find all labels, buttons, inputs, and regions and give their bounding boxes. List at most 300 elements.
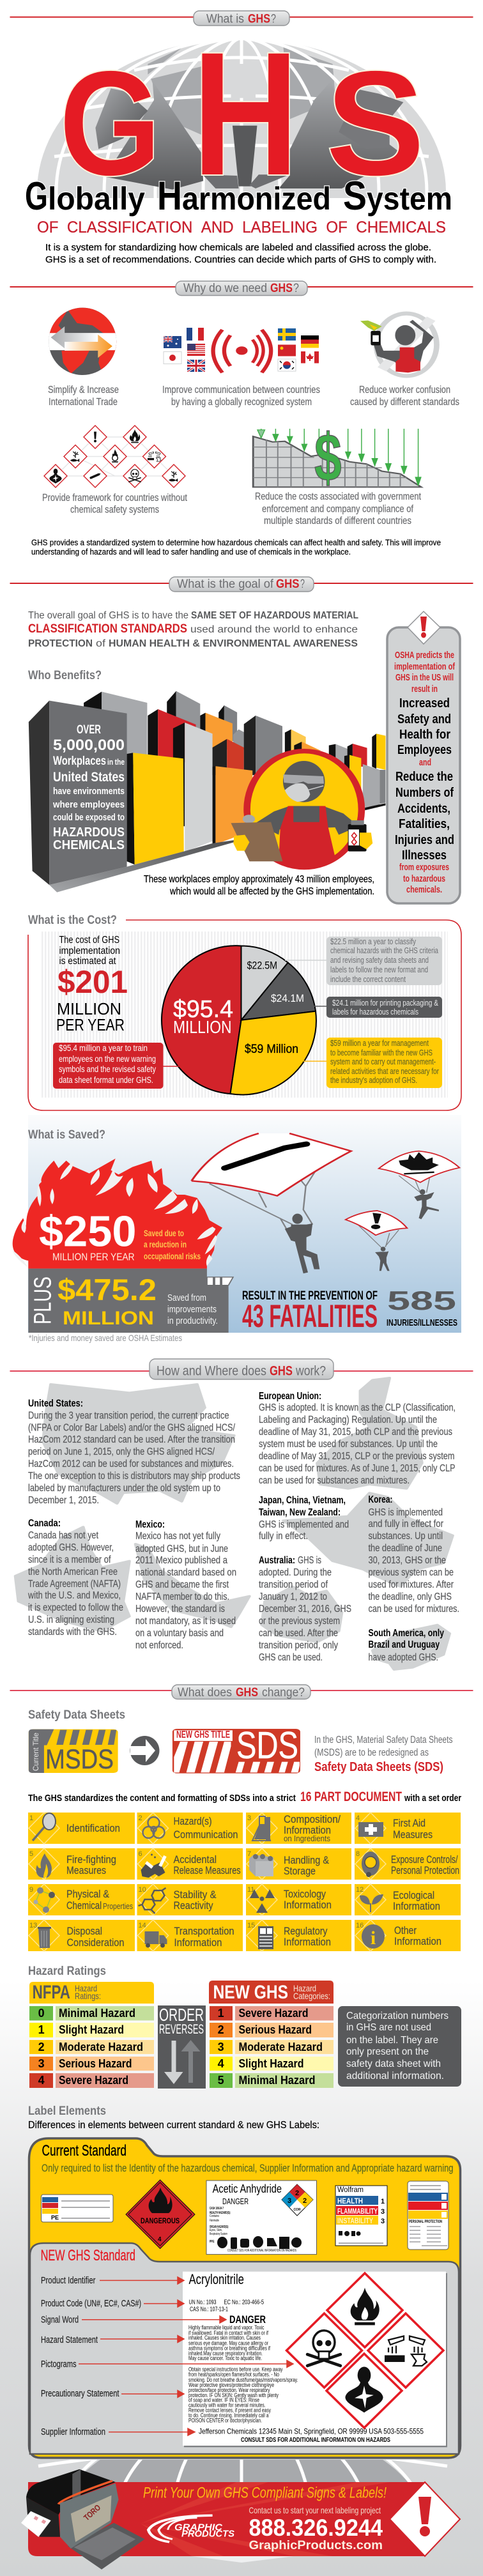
- text: 16 part document: 16 PART DOCUMENT: [300, 1790, 402, 1804]
- label sample: acetic anhydride: Flammable: [210, 2219, 219, 2223]
- section header: What is the goal of GHS?: GHS: [276, 578, 299, 591]
- contact details: [249, 2505, 383, 2552]
- section 13: [29, 1920, 124, 1951]
- panel: cost of GHS: [28, 920, 461, 1110]
- section header: How and Where does GHS work?: work?: [295, 1364, 326, 1379]
- table: new GHS hazard categories: NEW GHS: [213, 1982, 288, 2003]
- callout: training: $95.4 million a year to train: [59, 1043, 148, 1053]
- table: NFPA hazard ratings: 3: [38, 2057, 45, 2070]
- OSHA text: [394, 650, 456, 895]
- callout: training: [53, 1043, 182, 1089]
- text: Korea: 30, 2013, GHS or the: [368, 1555, 446, 1566]
- text: European Union: [259, 1391, 456, 1486]
- sample label card: CAS No.: 107-13-1: [190, 2306, 228, 2313]
- section 14: Transportation: [174, 1925, 234, 1937]
- section 4: First Aid: [393, 1817, 425, 1829]
- section 3: Information: [284, 1824, 331, 1836]
- text: European Union: can be used for substances and mixtures.: [259, 1475, 410, 1486]
- section 12: [355, 1884, 440, 1915]
- main title: H: [157, 174, 182, 218]
- stat: $250 million: MILLION PER YEAR: [52, 1252, 135, 1263]
- section header: What is the goal of GHS?: What is the goal of: [177, 578, 274, 591]
- text: Canada: the North American Free: [28, 1567, 118, 1577]
- building text: over 5,000,000 workplaces: CHEMICALS: [53, 838, 125, 852]
- badge: SDS new title: SDS: [236, 1724, 298, 1767]
- section 7: 7: [247, 1850, 251, 1858]
- text: Korea: and fully in effect for: [368, 1519, 444, 1529]
- label sample: wolfram: HEALTH: [337, 2196, 363, 2205]
- caption: trade: Simplify & Increase: [48, 385, 119, 395]
- cost summary: [56, 935, 128, 1034]
- heading: What is the Cost?: What is the Cost?: [28, 914, 117, 927]
- section 7: Handling &: [284, 1854, 330, 1866]
- text: European Union: system must be used for substances. Up until the: [259, 1439, 438, 1450]
- table: new GHS hazard categories: Minimal Hazard: [239, 2074, 316, 2087]
- text: Mexico: not mandatory, as it is used: [135, 1616, 236, 1627]
- text: South America: South America, only: [368, 1628, 444, 1639]
- main title: lobally: [48, 181, 145, 217]
- section 7: [247, 1848, 330, 1880]
- text: South America: [368, 1628, 444, 1663]
- section 15: 15: [247, 1922, 255, 1929]
- panel: OSHA predictions: [387, 611, 460, 903]
- text: MSDS redesign note: [314, 1735, 453, 1774]
- section 16: Other: [394, 1924, 417, 1936]
- table: new GHS hazard categories: Hazard: [293, 1983, 316, 1993]
- section 3: 3: [247, 1814, 251, 1822]
- text: Japan, China, Vietnam, Taiwan, New Zealand: fully in effect.: [259, 1531, 308, 1542]
- goal statement: PROTECTION: [28, 638, 93, 649]
- main title: G: [25, 174, 48, 218]
- stat: plus $475.2 million: in productivity.: [167, 1315, 218, 1326]
- contact details: Contact us to start your next labeling project: [249, 2505, 381, 2515]
- globe: [37, 40, 446, 198]
- text: Australia: can be used. After the: [259, 1628, 338, 1639]
- section 14: 14: [138, 1922, 146, 1929]
- table: new GHS hazard categories: Serious Hazard: [239, 2023, 312, 2036]
- section 2: Communication: [174, 1828, 238, 1841]
- section 3: on Ingredients: [284, 1834, 330, 1843]
- main title: ystem: [367, 181, 452, 217]
- text: Korea: [368, 1494, 459, 1614]
- section 4: [355, 1813, 433, 1844]
- intro text: It is a system for standardizing how chemicals are labeled and classified across the globe.: [45, 242, 431, 253]
- section header: What is GHS?: ?: [271, 13, 276, 26]
- OSHA text: result in: [411, 684, 438, 694]
- sample label card: EC No.: 203-466-5: [224, 2299, 264, 2306]
- section 12: Ecological: [393, 1889, 434, 1901]
- section 13: 13: [29, 1922, 37, 1929]
- heading: Label Elements: Differences in elements between current standard & new GHS Labels:: [28, 2120, 319, 2131]
- section 9: Properties: [103, 1901, 133, 1911]
- grid: 16 SDS sections: [28, 1813, 461, 1951]
- table: new GHS hazard categories: Severe Hazard: [239, 2007, 308, 2020]
- section 1: [29, 1813, 120, 1844]
- sample label card: Obtain special instructions before use. Keep away: [188, 2366, 283, 2373]
- section 15: Information: [284, 1936, 331, 1948]
- text: Australia: or the previous system: [259, 1616, 340, 1627]
- label sample: wolfram: 3: [381, 2218, 385, 2225]
- section 8: Personal Protection: [391, 1864, 459, 1876]
- text: Mexico: on a voluntary basis and: [135, 1628, 224, 1639]
- text: Canada: [27, 1518, 123, 1637]
- section header: What does GHS change?: change?: [262, 1686, 305, 1699]
- section 10: [138, 1884, 217, 1915]
- caption: framework: [42, 493, 187, 516]
- section 10: Stability &: [174, 1889, 217, 1901]
- stat: plus $475.2 million: $475.2: [57, 1273, 157, 1307]
- sample label card: May cause cancer. Toxic to aquatic life.: [188, 2355, 262, 2361]
- table: new GHS hazard categories: Slight Hazard: [239, 2057, 304, 2070]
- text: Korea: Korea:: [368, 1494, 392, 1505]
- caption: 43 million employees: These workplaces employ approximately 43 million employees,: [144, 874, 374, 885]
- label sample: wolfram: 3: [381, 2208, 385, 2216]
- building text: over 5,000,000 workplaces: where employees: [52, 799, 125, 810]
- text: Canada: it is expected to follow the: [28, 1602, 123, 1613]
- OSHA text: Health for: [399, 728, 450, 742]
- text: Mexico: However, the standard is: [135, 1604, 225, 1614]
- icon: parachuting workers: [192, 1133, 459, 1273]
- label sample: acetic anhydride: Contains: [210, 2214, 219, 2218]
- main title: armonized: [182, 181, 331, 217]
- callout: classify: chemical hazards with the GHS criteria: [330, 946, 439, 955]
- sample label card: Jefferson Chemicals 12345 Main St, Springfield, OR 99999 USA 503-555-5555: [199, 2426, 424, 2435]
- main title: S: [343, 174, 367, 218]
- table: new GHS hazard categories: 3: [218, 2041, 224, 2053]
- sample label card: to do. Continue rinsing. Immediately call a: [188, 2412, 268, 2419]
- text: United States: HazCom 2012 standard can be used. After the transition: [28, 1434, 235, 1445]
- caption: framework: Provide framework for countries without: [42, 493, 187, 503]
- pointers: label element names: [41, 2275, 293, 2437]
- logo: Graphic Products: GRAPHIC: [174, 2522, 223, 2533]
- pointers: label element names: Product Identifier: [41, 2275, 95, 2286]
- goal statement: [28, 610, 358, 649]
- icon: hazard diamonds: [44, 425, 185, 487]
- building text: over 5,000,000 workplaces: [52, 723, 125, 852]
- callout: categorization numbers: safety data sheet with: [346, 2058, 441, 2069]
- table: new GHS hazard categories: 2: [218, 2023, 224, 2036]
- 3D extrusions: [95, 64, 413, 190]
- icon: globe with trade arrows: [49, 308, 116, 375]
- callout: classify: $22.5 million a year to classify: [330, 937, 416, 946]
- logo: Graphic Products: PRODUCTS: [181, 2529, 234, 2539]
- section 14: Information: [174, 1936, 222, 1949]
- stat: $250 million: [39, 1208, 201, 1263]
- OSHA text: and: [419, 757, 431, 768]
- label sample: wolfram: FLAMMABILITY: [337, 2207, 378, 2216]
- section 16: [355, 1920, 441, 1951]
- sample label card: of soap and water. IF IN EYES: Rinse: [188, 2397, 259, 2404]
- caption: communication: by having a globally recognized system: [171, 397, 312, 408]
- sample label card: Highly flammable liquid and vapor. Toxic: [188, 2324, 264, 2331]
- table: NFPA hazard ratings: 2: [38, 2041, 45, 2053]
- text: Korea: can be used for mixtures.: [368, 1604, 459, 1614]
- sample label card: cautiously with water for several minutes.: [188, 2402, 266, 2409]
- section 11: [247, 1884, 332, 1915]
- section header: What is GHS?: GHS: [248, 13, 270, 26]
- headline: Print Your Own GHS Compliant Signs & Labels!: [143, 2484, 387, 2502]
- intro text: GHS is a set of recommendations. Countries can decide which parts of GHS to comply with.: [45, 254, 436, 265]
- table: NFPA hazard ratings: NFPA: [33, 1982, 70, 2003]
- pointers: label element names: Product Code (UN#, EC#, CAS#): [41, 2298, 141, 2309]
- sample label card: UN No.: 1093: [189, 2299, 217, 2306]
- contact details: 888.326.9244: [249, 2515, 383, 2541]
- text: Japan, China, Vietnam, Taiwan, New Zealand: [259, 1495, 349, 1542]
- text: Mexico: adopted GHS, but in June: [135, 1544, 228, 1554]
- caption: 43 million employees: which would all be affected by the GHS implementation.: [169, 886, 374, 897]
- callout: order reverses: [158, 2005, 206, 2089]
- text: Australia: Australia:: [259, 1555, 295, 1566]
- stat: plus $475.2 million: MILLION: [63, 1308, 154, 1329]
- pie labels: MILLION: [173, 1017, 231, 1037]
- icon: warning diamond: [390, 2482, 460, 2556]
- text: United States: December 1, 2015.: [28, 1495, 99, 1506]
- section 1: 1: [29, 1814, 33, 1822]
- callout: management: $59 million a year for management: [330, 1038, 429, 1048]
- section 5: Measures: [66, 1864, 106, 1876]
- heading: Current Standard: Current Standard: [42, 2142, 126, 2159]
- caption: worker: caused by different standards: [350, 397, 459, 408]
- label sample: acetic anhydride: 3: [288, 2197, 291, 2205]
- cost summary: implementation: [59, 946, 120, 956]
- heading: What is Saved?: What is Saved?: [28, 1128, 105, 1142]
- text: Japan, China, Vietnam, Taiwan, New Zealand: Japan, China, Vietnam,: [259, 1495, 346, 1506]
- section 16: 16: [356, 1922, 364, 1929]
- callout: classify: labels to follow the new format and: [330, 965, 428, 974]
- stat: $250 million: Saved due to: [144, 1228, 184, 1238]
- label sample: check box: PERSONAL PROTECTION: [409, 2220, 442, 2224]
- logo: Graphic Products: [148, 2515, 234, 2542]
- section 12: 12: [356, 1886, 364, 1894]
- text: 16 part document: The GHS standardizes the content and formatting of SDSs into a strict: [28, 1793, 296, 1804]
- table: NFPA hazard ratings: Minimal Hazard: [59, 2007, 135, 2020]
- icon: worker with clipboard: [231, 751, 372, 868]
- table: NFPA hazard ratings: Moderate Hazard: [59, 2041, 143, 2053]
- table: NFPA hazard ratings: 4: [38, 2074, 45, 2087]
- badge: MSDS current title: MSDS: [45, 1744, 114, 1775]
- caption: worker: [350, 385, 459, 408]
- section 11: Toxicology: [284, 1888, 326, 1900]
- icon: label printer: TORO: [82, 2503, 102, 2522]
- callout: categorization numbers: Categorization numbers: [346, 2011, 448, 2021]
- section header: What does GHS change?: [10, 1685, 473, 1699]
- pie labels: $59 Million: [245, 1043, 298, 1056]
- label sample: acetic anhydride: CAS# 108-24-7: [210, 2207, 224, 2211]
- text: Australia: [259, 1555, 351, 1663]
- section header: Why do we need GHS?: Why do we need: [183, 282, 267, 295]
- stat: $250 million: occupational risks: [144, 1251, 201, 1261]
- goal statement: HUMAN HEALTH & ENVIRONMENTAL AWARENESS: [109, 638, 358, 649]
- icon: arrow: [130, 1736, 160, 1765]
- section header: Why do we need GHS?: [10, 281, 473, 295]
- callout: training: data sheet format under GHS.: [59, 1075, 153, 1085]
- OSHA text: Accidents,: [397, 802, 450, 816]
- text: Mexico: 2011 Mexico published a: [135, 1555, 227, 1566]
- section 13: Disposal: [66, 1925, 102, 1937]
- label sample: acetic anhydride: 2: [295, 2189, 299, 2197]
- section 2: Hazard(s): [174, 1815, 212, 1827]
- callout: printing: [314, 997, 442, 1018]
- heading: Who Benefits?: Who Benefits?: [28, 669, 102, 682]
- section 16: Information: [394, 1935, 441, 1947]
- OSHA text: Injuries and: [395, 833, 454, 847]
- text: Canada: Canada has not yet: [28, 1530, 98, 1541]
- callout: order reverses: REVERSES: [159, 2022, 204, 2037]
- section 2: 2: [138, 1814, 142, 1822]
- text: 16 part document: with a set order: [404, 1793, 461, 1804]
- label sample: hmis small: PE: [51, 2214, 59, 2221]
- OSHA text: Employees: [397, 743, 452, 757]
- heading: Safety Data Sheets: Safety Data Sheets: [28, 1708, 125, 1722]
- section header: How and Where does GHS work?: How and Where does: [157, 1364, 266, 1379]
- label sample: wolfram: Wolfram: [337, 2185, 364, 2194]
- callout: order reverses: ORDER: [159, 2005, 204, 2025]
- section 16: i: [371, 1928, 376, 1949]
- text: Mexico: Mexico:: [135, 1519, 165, 1530]
- badge: MSDS current title: [29, 1729, 118, 1775]
- icon: flags and signal: [164, 328, 319, 372]
- label sample: acetic anhydride: Acetic Anhydride: [213, 2182, 282, 2195]
- label sample: acetic anhydride: Respiratory System: [210, 2232, 227, 2236]
- table: new GHS hazard categories: Categories:: [293, 1991, 330, 2001]
- callout: classify: and revising safety data sheets and: [330, 955, 429, 965]
- heading: Hazard Ratings: Hazard Ratings: [28, 1965, 106, 1978]
- text: United States: (NFPA or Color Bar Labels) and/or the GHS aligned HCS/: [28, 1423, 235, 1434]
- section 3: [247, 1813, 341, 1844]
- pointers: label element names: Hazard Statement: [41, 2334, 98, 2345]
- sample label card: Acrylonitrile: [189, 2271, 244, 2287]
- sample label card: inhaled.May cause respiratory irritation.: [188, 2350, 263, 2357]
- section 7: Storage: [284, 1865, 316, 1877]
- callout: management: related activities that are necessary for: [330, 1066, 440, 1076]
- text: Japan, China, Vietnam, Taiwan, New Zealand: Taiwan, New Zealand:: [259, 1507, 341, 1518]
- cost summary: MILLION: [57, 999, 121, 1018]
- callout: classify: [285, 937, 442, 985]
- text: United States: HazCom 2012 can be used for substances and mixtures.: [28, 1459, 234, 1469]
- callout: categorization numbers: additional information.: [346, 2071, 444, 2082]
- caption: communication: [162, 385, 320, 408]
- callout: categorization numbers: in GHS are not used: [346, 2022, 431, 2033]
- OSHA text: chemicals.: [406, 884, 442, 895]
- section 4: Measures: [393, 1828, 433, 1841]
- OSHA text: Fatalities,: [399, 817, 450, 831]
- section 9: Chemical: [66, 1899, 102, 1912]
- hero: globe with GHS letters: [37, 40, 446, 198]
- sample label card: Wear protective gloves/protective clothing/eye: [188, 2382, 274, 2388]
- text: Canada: U.S. in aligning existing: [28, 1614, 114, 1625]
- label sample: dangerous placard: DANGEROUS: [141, 2216, 180, 2225]
- sample label card: [183, 2271, 447, 2447]
- pie labels: $95.4: [173, 996, 233, 1023]
- text: United States: United States:: [28, 1399, 83, 1409]
- callout: categorization numbers: [338, 2006, 461, 2087]
- section 2: [138, 1813, 238, 1844]
- icon: flames: [12, 1158, 222, 1269]
- section 4: 4: [356, 1814, 360, 1822]
- page background gradient: [0, 1981, 483, 2576]
- section 9: Physical &: [66, 1888, 110, 1900]
- OSHA text: OSHA predicts the: [395, 650, 454, 661]
- text: Korea: used for mixtures. After: [368, 1579, 454, 1590]
- stat: prevention of fatalities: 585: [387, 1285, 456, 1315]
- caption: costs: enforcement and company compliance of: [262, 503, 413, 515]
- label sample: acetic anhydride: PPE:: [210, 2240, 215, 2244]
- building text: over 5,000,000 workplaces: could be exposed to: [53, 812, 125, 823]
- OSHA text: Illnesses: [402, 848, 447, 862]
- table: new GHS hazard categories: [209, 1981, 334, 2088]
- sample label card: smoking. Do not breathe dust/fume/gas/mist/vapors/spray.: [188, 2377, 298, 2383]
- label sample: wolfram: INSTABILITY: [337, 2216, 373, 2225]
- letter G: G: [59, 40, 162, 207]
- section 15: [247, 1920, 331, 1951]
- stat: $250 million: a reduction in: [144, 1239, 187, 1250]
- table: new GHS hazard categories: 4: [218, 2057, 224, 2070]
- label sample: acetic anhydride: CONSULT SDS FOR ADDITIONAL INFORMATION ON HAZARDS: [227, 2249, 296, 2253]
- callout: categorization numbers: only present on the: [346, 2046, 429, 2057]
- section header: What does GHS change?: What does: [178, 1686, 232, 1699]
- table: new GHS hazard categories: 1: [218, 2007, 224, 2020]
- sample label card: if swallowed. Fatal in contact with skin or if: [188, 2329, 268, 2336]
- heading: Label Elements: [28, 2104, 319, 2131]
- panel: current standard: [29, 2138, 460, 2458]
- callout: management: [303, 1038, 442, 1088]
- section 15: Regulatory: [284, 1925, 328, 1937]
- pointers: label element names: Precautionary Statement: [41, 2388, 119, 2399]
- section header: What is GHS?: What is: [206, 13, 244, 26]
- section 3: Composition/: [284, 1813, 341, 1825]
- OSHA text: Safety and: [397, 712, 451, 726]
- pointers: label element names: Signal Word: [41, 2314, 79, 2326]
- sample label card: asthma symptoms or breathing difficulties if: [188, 2345, 270, 2351]
- callout: classify: include the correct content: [330, 974, 406, 984]
- contact details: GraphicProducts.com: [249, 2539, 383, 2552]
- table: NFPA hazard ratings: Slight Hazard: [59, 2023, 124, 2036]
- footnote: *Injuries and money saved are OSHA Estimates: [29, 1333, 182, 1343]
- section 12: Information: [393, 1900, 440, 1912]
- text: Canada: Canada:: [28, 1518, 61, 1529]
- building text: over 5,000,000 workplaces: United States: [53, 770, 125, 785]
- OSHA text: Reduce the: [395, 770, 453, 784]
- stat: prevention of fatalities: RESULT IN THE PREVENTION OF: [242, 1289, 378, 1303]
- icon: confused worker: [360, 314, 436, 376]
- OSHA text: implementation of: [394, 661, 456, 672]
- section header: Why do we need GHS?: GHS: [270, 282, 293, 295]
- section 13: Consideration: [66, 1936, 124, 1949]
- callout: management: system and to carry out management-: [330, 1057, 436, 1066]
- label sample: hmis small: [42, 2195, 113, 2222]
- section 10: 10: [138, 1886, 146, 1894]
- section header: What does GHS change?: GHS: [236, 1686, 258, 1699]
- letter H: H: [192, 15, 300, 213]
- caption: framework: chemical safety systems: [70, 505, 159, 516]
- section 6: Accidental: [174, 1853, 217, 1866]
- callout: management: the industry's adoption of GHS.: [330, 1075, 417, 1085]
- text: Australia: adopted. During the: [259, 1567, 332, 1578]
- text: United States: labeled by manufacturers under the old system up to: [28, 1483, 220, 1494]
- map background: [15, 1378, 453, 1669]
- pointers: label element names: Pictograms: [41, 2359, 77, 2370]
- text: Korea: the deadline of June: [368, 1543, 442, 1554]
- buildings: [29, 691, 385, 893]
- section 10: Reactivity: [174, 1899, 213, 1912]
- label sample: acetic anhydride: DANGER: [222, 2196, 249, 2206]
- section 6: 6: [138, 1850, 142, 1858]
- text: Canada: adopted GHS. However,: [28, 1542, 114, 1553]
- goal statement: The overall goal of GHS is to have the: [28, 610, 188, 621]
- section 8: 8: [356, 1850, 360, 1858]
- sample label card: inhaled. Causes skin irritation. Causes: [188, 2334, 261, 2341]
- text: Korea: substances. Up until: [368, 1531, 443, 1542]
